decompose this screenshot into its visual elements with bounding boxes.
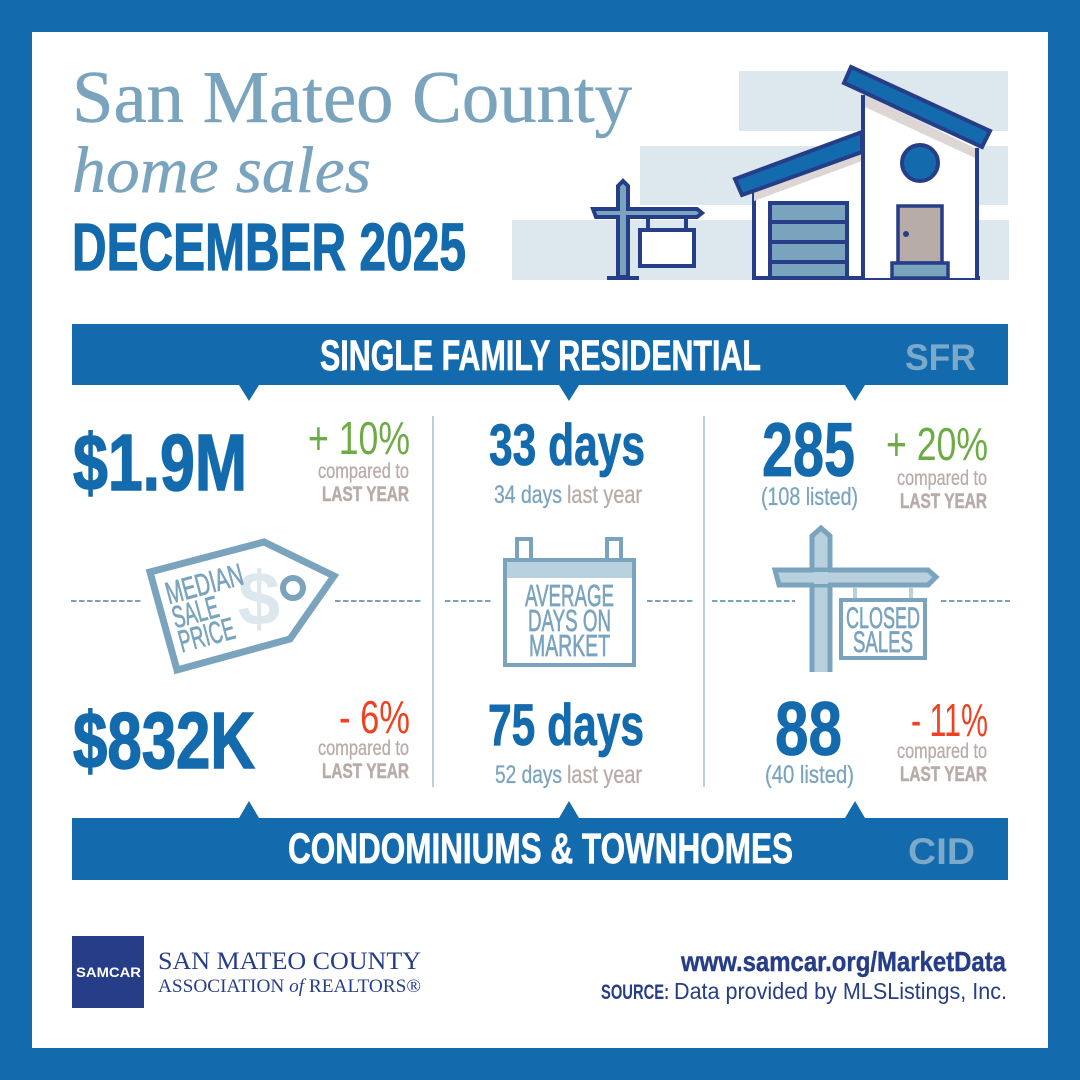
icon: calendar <box>505 539 634 665</box>
logo: SAMCAR <box>72 936 421 1008</box>
stat: CID days on market: last year <box>567 761 642 789</box>
stat: CID closed sales: 88 <box>775 687 842 772</box>
stat: CID median price: $832K <box>73 696 255 785</box>
icon: house <box>735 67 990 278</box>
stat: SFR days on market <box>489 413 645 509</box>
stat: SFR closed sales: 285 <box>762 408 855 493</box>
title line 1: San Mateo County <box>72 57 632 139</box>
stat: SFR closed sales <box>761 408 988 513</box>
stat: SFR days on market: last year <box>567 481 642 509</box>
stat: CID days on market <box>488 693 644 789</box>
comparison: compared to <box>897 467 987 490</box>
icon: price tag <box>150 542 334 670</box>
footer source and link: Data provided by MLSListings, Inc. <box>674 978 1007 1004</box>
footer source and link <box>601 946 1007 1004</box>
banner heading: SINGLE FAMILY RESIDENTIAL <box>320 332 761 380</box>
dollar sign: $ <box>238 557 280 642</box>
logo wordmark: SAN MATEO COUNTY <box>158 948 421 975</box>
panel: single family banner <box>72 324 1008 401</box>
icon: small sign post <box>593 181 702 278</box>
listed: (40 listed) <box>765 761 854 789</box>
calendar label <box>525 578 614 663</box>
column dividers <box>433 416 704 787</box>
title date: DECEMBER 2025 <box>72 210 466 285</box>
sign label: CLOSED <box>846 602 920 635</box>
tag label: SALE <box>168 589 223 635</box>
footer source and link: www.samcar.org/MarketData <box>680 946 1006 977</box>
change: + 10% <box>308 412 410 464</box>
tag label: PRICE <box>175 611 239 659</box>
title line 2: home sales <box>72 134 371 207</box>
stat: SFR median price: LAST YEAR <box>322 483 409 506</box>
banner heading: CONDOMINIUMS & TOWNHOMES <box>288 825 793 873</box>
icon: closed sales sign <box>775 528 936 672</box>
dashed connector lines <box>71 600 1010 602</box>
stat: SFR closed sales: LAST YEAR <box>900 490 987 513</box>
banner code: SFR <box>905 337 976 378</box>
sign label <box>846 602 920 659</box>
tag label: MEDIAN <box>162 557 247 611</box>
calendar label: AVERAGE <box>525 578 614 613</box>
stat: CID median price <box>73 691 410 785</box>
prior year: 52 days <box>495 761 562 789</box>
tag label <box>162 557 260 659</box>
calendar label: MARKET <box>529 628 610 663</box>
source line: SOURCE: <box>601 981 669 1004</box>
logo: SAMCAR: ASSOCIATION of REALTORS® <box>158 976 421 997</box>
stat: CID median price: LAST YEAR <box>322 760 409 783</box>
listed: (108 listed) <box>761 483 858 511</box>
logo: SAMCAR: SAMCAR <box>76 964 141 980</box>
illustration: house and for-sale sign <box>512 67 1009 280</box>
comparison: compared to <box>897 740 987 763</box>
stat: CID closed sales <box>765 687 988 789</box>
prior year: 34 days <box>494 481 562 509</box>
change: - 11% <box>911 694 988 746</box>
comparison: compared to <box>318 460 409 483</box>
title <box>72 57 632 285</box>
panel: condominiums banner <box>72 801 1008 880</box>
stat: SFR median price <box>73 412 410 507</box>
calendar label: DAYS ON <box>528 603 611 638</box>
sign label: SALES <box>853 626 913 659</box>
stat: SFR days on market: 33 days <box>489 413 645 478</box>
banner code: CID <box>908 831 975 872</box>
stat: CID closed sales: LAST YEAR <box>900 763 987 786</box>
change: - 6% <box>339 691 410 743</box>
change: + 20% <box>886 418 988 470</box>
stat: CID days on market: 75 days <box>488 693 644 758</box>
comparison: compared to <box>318 737 409 760</box>
stat: SFR median price: $1.9M <box>73 418 247 507</box>
